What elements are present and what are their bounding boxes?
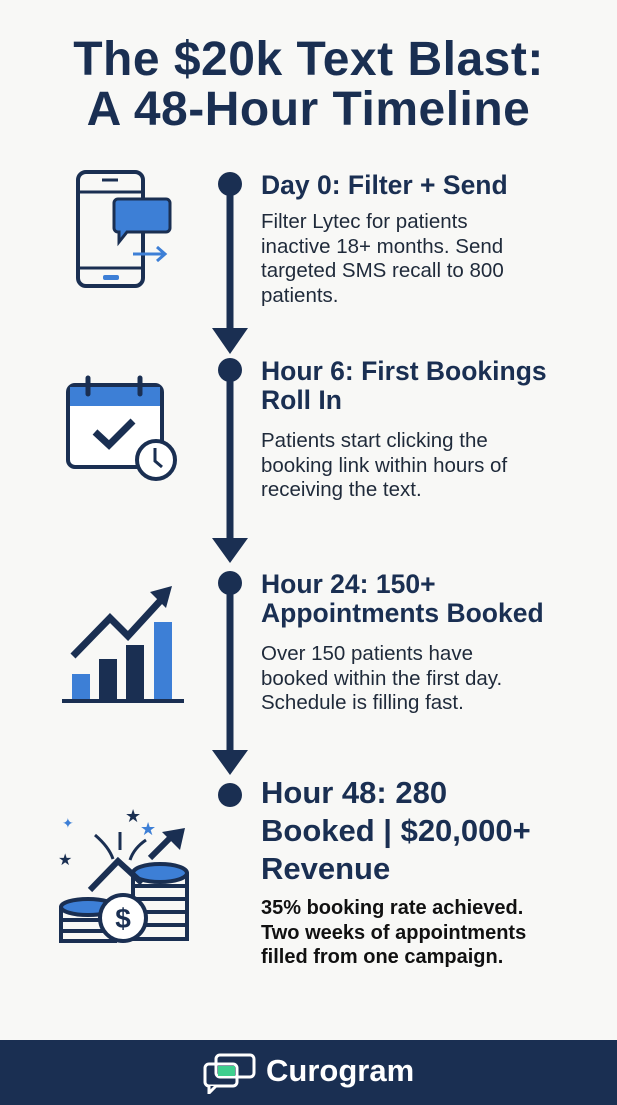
icon: coins: ✦ bbox=[62, 815, 74, 831]
step 4 text: Two weeks of appointments bbox=[261, 922, 526, 944]
step 1 text: inactive 18+ months. Send bbox=[261, 234, 503, 258]
logo text: Curogram bbox=[266, 1053, 414, 1088]
step 3 heading: Appointments Booked bbox=[261, 598, 544, 628]
footer bbox=[0, 1040, 617, 1105]
step 3 text: Over 150 patients have bbox=[261, 642, 473, 665]
step 4 text: 35% booking rate achieved. bbox=[261, 897, 523, 919]
icon: coins: ★ bbox=[140, 819, 156, 839]
step 2 text: booking link within hours of bbox=[261, 454, 507, 476]
step 3 text: booked within the first day. bbox=[261, 666, 502, 690]
step 4 heading: Revenue bbox=[261, 851, 390, 886]
step 1 text: targeted SMS recall to 800 bbox=[261, 259, 504, 282]
step 2 text bbox=[261, 429, 508, 501]
step 4 heading: Hour 48: 280 bbox=[261, 775, 447, 810]
step 4 text: filled from one campaign. bbox=[261, 946, 503, 968]
step 2 text: receiving the text. bbox=[261, 478, 422, 501]
icon: coins: ★ bbox=[125, 806, 141, 826]
step 2 heading bbox=[261, 356, 547, 415]
logo icon bbox=[204, 1054, 256, 1094]
title bbox=[73, 33, 544, 136]
icon: coins: $ bbox=[115, 903, 131, 934]
step 1 text: patients. bbox=[261, 284, 338, 306]
step 3 text: Schedule is filling fast. bbox=[261, 691, 464, 714]
icon: coins bbox=[58, 806, 189, 943]
step 1 text bbox=[261, 210, 504, 306]
step 3 heading: Hour 24: 150+ bbox=[261, 569, 436, 599]
icon: coins: ★ bbox=[58, 852, 72, 869]
icon: growth chart bbox=[62, 586, 184, 703]
step 4 text bbox=[261, 897, 526, 968]
step 3 text bbox=[261, 642, 502, 714]
step 3 heading bbox=[261, 569, 544, 628]
step 2 text: Patients start clicking the bbox=[261, 429, 488, 452]
step 2 heading: Hour 6: First Bookings bbox=[261, 356, 547, 386]
icon: phone bbox=[76, 170, 172, 288]
title: The $20k Text Blast: bbox=[73, 33, 544, 86]
step 4 heading: Booked | $20,000+ bbox=[261, 813, 531, 848]
step 4 heading bbox=[261, 775, 531, 886]
step 2 heading: Roll In bbox=[261, 385, 342, 415]
title: A 48-Hour Timeline bbox=[87, 83, 530, 136]
icon: calendar bbox=[66, 376, 177, 481]
step 1 text: Filter Lytec for patients bbox=[261, 210, 468, 233]
step 1 heading: Day 0: Filter + Send bbox=[261, 170, 508, 200]
